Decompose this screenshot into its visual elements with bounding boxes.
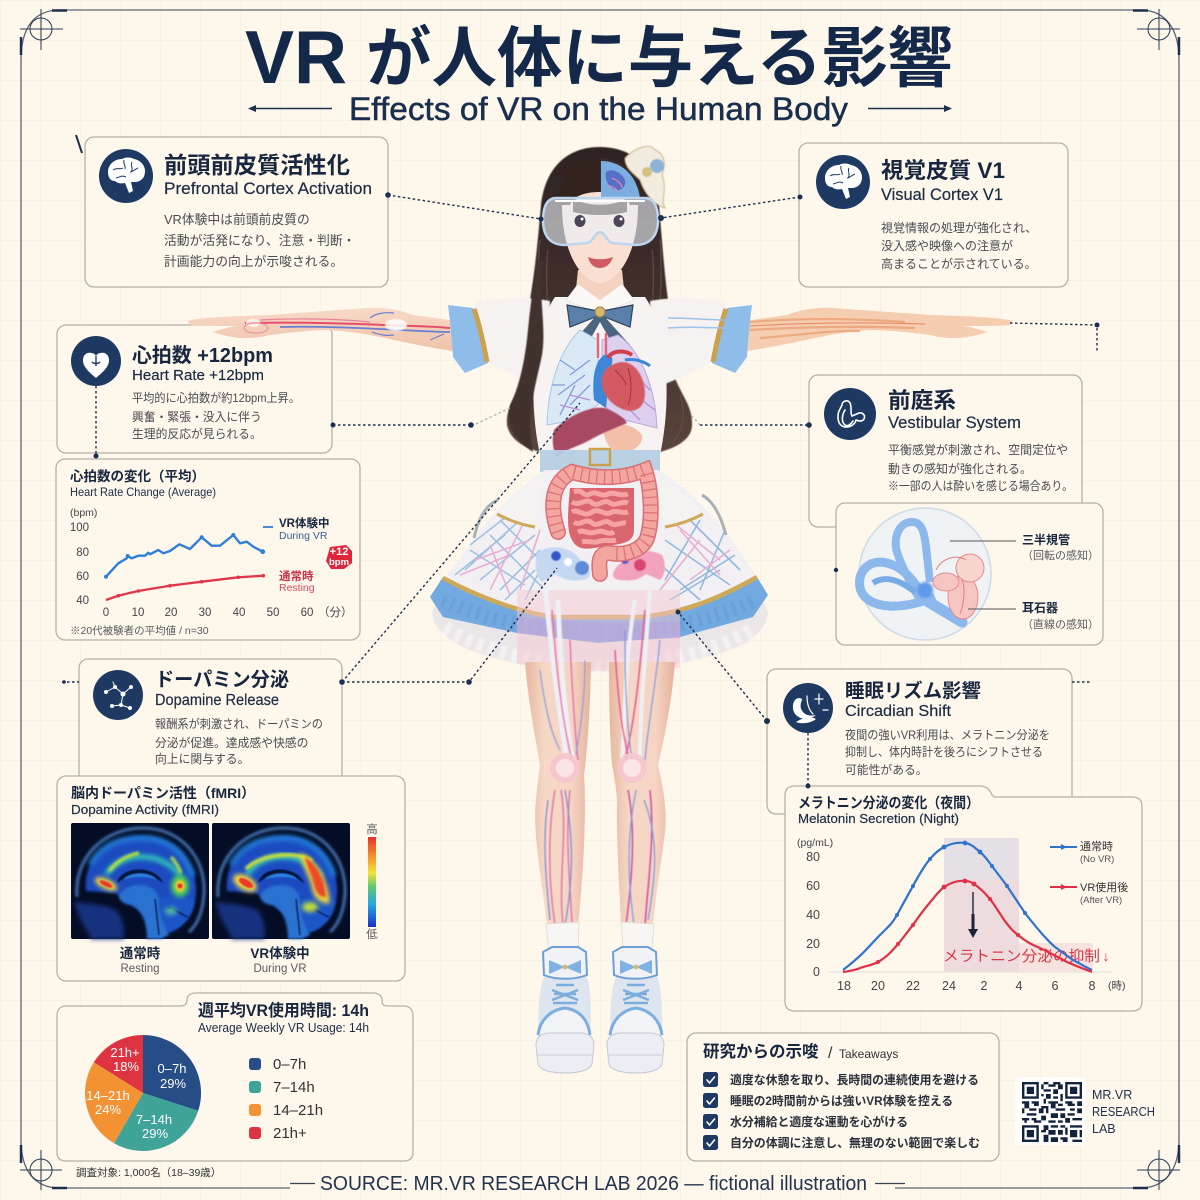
figure: left shoe bbox=[536, 947, 594, 1073]
legend: resting bbox=[279, 569, 315, 594]
figure: waist belt bbox=[540, 449, 660, 476]
figure: mouth bbox=[588, 257, 613, 268]
caption: during VR: During VR bbox=[253, 963, 307, 975]
legend: during VR: VR体験中 bbox=[279, 516, 329, 530]
axes: 20 bbox=[806, 937, 820, 951]
axis labels: 80 bbox=[76, 547, 89, 559]
organ: lungs bbox=[547, 330, 657, 428]
title: VR bbox=[245, 15, 347, 99]
checklist: 水分補給と適度な運動を心がける bbox=[730, 1114, 908, 1129]
axis labels: 10 bbox=[132, 607, 144, 619]
brain scan: resting bbox=[71, 823, 209, 939]
axes: (pg/mL) bbox=[797, 837, 833, 849]
chart heading: メラトニン分泌の変化（夜間） bbox=[798, 794, 979, 812]
figure: left leg bbox=[525, 662, 591, 925]
figure: hair flower bbox=[625, 146, 665, 208]
label: semicircular canals bbox=[950, 532, 1099, 609]
legend: 21h+ bbox=[273, 1125, 307, 1142]
heading: ドーパミン分泌 bbox=[155, 669, 289, 691]
figure: skirt gold trim bbox=[443, 577, 757, 617]
panel: inner ear bbox=[836, 503, 1103, 645]
text block: 抑制し、体内時計を後ろにシフトさせる bbox=[845, 745, 1043, 759]
anatomy: leg vessels bbox=[540, 585, 660, 925]
legend bbox=[249, 1056, 323, 1142]
callout: melatonin suppression: ↓ bbox=[1102, 948, 1110, 964]
label: otolith organs: （直線の感知） bbox=[1022, 617, 1099, 631]
panel: dopamine release bbox=[79, 659, 342, 784]
text block: 計画能力の向上が示唆される。 bbox=[164, 254, 343, 269]
axes: 2 bbox=[981, 979, 988, 993]
legend: 7–14h bbox=[273, 1079, 315, 1096]
pink band bbox=[944, 880, 1019, 972]
figure: back hair bbox=[507, 147, 692, 452]
checklist: 自分の体調に注意し、無理のない範囲で楽しむ bbox=[730, 1135, 980, 1150]
label: semicircular canals: 三半規管 bbox=[1022, 532, 1070, 547]
pie chart: 0–7h bbox=[158, 1061, 186, 1076]
text block: 可能性がある。 bbox=[845, 763, 928, 777]
text block bbox=[845, 728, 1050, 777]
caption: resting bbox=[120, 945, 161, 975]
heading: 視覚皮質 V1 bbox=[881, 158, 1005, 183]
color scale: 低 bbox=[366, 928, 378, 941]
axes: 60 bbox=[806, 879, 820, 893]
line: resting bbox=[106, 574, 265, 600]
figure: skirt petticoat bbox=[432, 595, 768, 672]
pie chart: 7–14h bbox=[136, 1112, 172, 1127]
text block: 平均的に心拍数が約12bpm上昇。 bbox=[132, 391, 300, 405]
connector: circadian bbox=[676, 610, 770, 724]
subheading: Average Weekly VR Usage: 14h bbox=[198, 1021, 369, 1035]
figure: right shoe bbox=[607, 947, 664, 1073]
icon: brain bbox=[816, 155, 870, 209]
axes: 24 bbox=[942, 979, 956, 993]
axis labels: 30 bbox=[199, 607, 211, 619]
checklist bbox=[703, 1072, 980, 1150]
figure: left arm bbox=[188, 308, 460, 352]
figure: face bbox=[557, 158, 643, 283]
axes bbox=[797, 837, 1126, 993]
pie chart bbox=[85, 1035, 201, 1151]
figure: blue ruffle bbox=[430, 577, 768, 643]
panel: fMRI dopamine activity bbox=[57, 776, 405, 981]
lab name: RESEARCH bbox=[1092, 1105, 1155, 1119]
heading bbox=[703, 1042, 898, 1062]
panel: melatonin chart bbox=[785, 786, 1142, 1011]
text block: 向上に関与する。 bbox=[155, 752, 249, 766]
text block: 没入感や映像への注意が bbox=[881, 238, 1013, 253]
figure: right arm bbox=[740, 308, 1012, 352]
axes: 20 bbox=[871, 979, 885, 993]
pie chart: 29% bbox=[142, 1126, 168, 1141]
figure: blouse torso bbox=[533, 297, 667, 455]
heading: 前頭前皮質活性化 bbox=[164, 152, 350, 178]
subheading: Visual Cortex V1 bbox=[881, 186, 1003, 204]
axis labels: 100 bbox=[70, 522, 89, 534]
text block: 視覚情報の処理が強化され、 bbox=[881, 220, 1037, 235]
figure: see-through panel over legs bbox=[517, 590, 680, 671]
subtitle with arrows bbox=[248, 91, 952, 127]
icon: neural network bbox=[93, 670, 143, 720]
survey footnote: 調査対象: 1,000名（18–39歳） bbox=[76, 1166, 221, 1179]
figure: overskirt peplum bbox=[474, 475, 726, 538]
text block: 高まることが示されている。 bbox=[881, 256, 1037, 271]
text block: 活動が活発になり、注意・判断・ bbox=[164, 233, 355, 248]
heading: 睡眠リズム影響 bbox=[845, 679, 981, 702]
axis labels bbox=[70, 507, 352, 619]
chart subheading: Heart Rate Change (Average) bbox=[70, 485, 216, 499]
panel: vestibular system bbox=[809, 375, 1082, 527]
legend: during VR: During VR bbox=[279, 530, 328, 542]
pie chart: 29% bbox=[160, 1076, 186, 1091]
line: during VR bbox=[104, 533, 265, 579]
callout: melatonin suppression bbox=[943, 943, 1110, 972]
connector: prefrontal to goggles bbox=[385, 192, 544, 222]
badge: +12 bpm: bpm bbox=[329, 557, 349, 568]
arrow: decrease bbox=[968, 892, 978, 938]
subheading: Dopamine Activity (fMRI) bbox=[71, 802, 219, 817]
organ: heart bbox=[593, 333, 650, 411]
axes: 0 bbox=[813, 965, 820, 979]
heading: Takeaways bbox=[839, 1047, 898, 1061]
heading: 週平均VR使用時間: 14h bbox=[198, 1001, 369, 1020]
connector: circadian to chart bbox=[806, 733, 810, 788]
lab name: LAB bbox=[1092, 1122, 1116, 1136]
axes: 18 bbox=[837, 979, 851, 993]
checklist: 適度な休憩を取り、長時間の連続使用を避ける bbox=[730, 1072, 979, 1087]
pie chart: 18% bbox=[113, 1059, 139, 1074]
text block: 生理的反応が見られる。 bbox=[132, 427, 262, 441]
figure: ruffle pleats bbox=[443, 600, 756, 634]
chart heading: 心拍数の変化（平均） bbox=[70, 468, 205, 484]
panel: takeaways bbox=[687, 1033, 999, 1161]
axes: (時) bbox=[1108, 980, 1126, 992]
figure: sleeve right bbox=[650, 298, 752, 388]
axes: 80 bbox=[806, 850, 820, 864]
axes: 40 bbox=[806, 908, 820, 922]
text block: 分泌が促進。達成感や快感の bbox=[155, 736, 308, 750]
figure: hair strands bbox=[517, 240, 683, 444]
figure: skirt body bbox=[443, 470, 757, 617]
title: が人体に与える影響 bbox=[366, 21, 953, 95]
text block bbox=[155, 717, 323, 766]
figure: skirt pattern bbox=[455, 510, 740, 600]
figure: front hair lock bbox=[509, 260, 543, 452]
figure: neck bbox=[575, 270, 625, 308]
axis labels: 20 bbox=[165, 607, 177, 619]
figure: petticoat pleats bbox=[445, 628, 755, 668]
connector: right hand bbox=[1010, 322, 1100, 352]
subheading: Vestibular System bbox=[888, 413, 1021, 432]
device: VR goggles bbox=[543, 198, 658, 245]
figure: right sock bbox=[621, 922, 654, 960]
icon: moon and stars bbox=[783, 683, 833, 733]
figure: purple ruffle overlay bbox=[517, 617, 680, 642]
connector: ear detail bbox=[834, 568, 838, 572]
brain scan: during VR bbox=[212, 823, 350, 939]
pie chart: 24% bbox=[95, 1102, 121, 1117]
legend: after VR: (After VR) bbox=[1080, 895, 1122, 906]
legend: during VR bbox=[263, 516, 329, 542]
panel: prefrontal cortex bbox=[85, 137, 388, 287]
connector: dopamine left tick bbox=[62, 680, 79, 684]
subheading: Circadian Shift bbox=[845, 703, 952, 720]
icon: inner ear bbox=[824, 388, 876, 440]
line: after VR bbox=[843, 879, 1092, 972]
caption: during VR bbox=[250, 945, 310, 975]
badge: +12 bpm bbox=[326, 545, 352, 569]
lab name bbox=[1092, 1088, 1155, 1136]
caption: resting: Resting bbox=[120, 963, 160, 975]
connector: vestibular bbox=[692, 416, 812, 428]
connector: heart card to chart bbox=[94, 386, 98, 458]
connector: visual cortex to goggles bbox=[658, 194, 802, 221]
legend: resting: Resting bbox=[279, 582, 315, 594]
axis labels: 0 bbox=[103, 607, 109, 619]
line: no VR bbox=[843, 841, 1092, 970]
subtitle with arrows: Effects of VR on the Human Body bbox=[349, 91, 848, 127]
text block: 興奮・緊張・没入に伴う bbox=[132, 410, 262, 424]
label: semicircular canals: （回転の感知） bbox=[1022, 548, 1099, 562]
legend: no VR: 通常時 bbox=[1080, 840, 1113, 853]
color scale: 高 bbox=[366, 823, 378, 836]
heading: / bbox=[828, 1045, 833, 1062]
panel: heart rate bbox=[57, 325, 332, 453]
heading: 心拍数 +12bpm bbox=[132, 344, 273, 367]
figure: collar and bow bbox=[566, 284, 634, 352]
subheading: Dopamine Release bbox=[155, 692, 279, 709]
text block bbox=[132, 391, 300, 441]
legend: 0–7h bbox=[273, 1056, 306, 1073]
legend: no VR: (No VR) bbox=[1080, 854, 1114, 865]
figure: right leg bbox=[609, 662, 675, 925]
heading: 研究からの示唆 bbox=[703, 1042, 819, 1061]
subheading: Heart Rate +12bpm bbox=[132, 367, 264, 384]
axis labels: （分） bbox=[318, 606, 352, 619]
pie chart: 21h+ bbox=[110, 1045, 140, 1060]
connector: dopamine to brain stem bbox=[339, 403, 580, 685]
icon: heart bbox=[71, 336, 121, 386]
QR code bbox=[1015, 1077, 1085, 1145]
panel: visual cortex bbox=[799, 143, 1068, 287]
text block: 平衡感覚が刺激され、空間定位や bbox=[888, 442, 1068, 457]
text block bbox=[164, 212, 355, 269]
legend: after VR bbox=[1050, 880, 1128, 906]
legend: after VR: VR使用後 bbox=[1080, 880, 1128, 894]
pie chart: 14–21h bbox=[86, 1088, 130, 1103]
legend: resting: 通常時 bbox=[279, 569, 314, 583]
lab name: MR.VR bbox=[1092, 1088, 1132, 1102]
color scale bbox=[366, 823, 378, 941]
subheading: Prefrontal Cortex Activation bbox=[164, 179, 372, 198]
axis labels: 40 bbox=[233, 607, 245, 619]
axis labels: 60 bbox=[76, 571, 89, 583]
axes: 22 bbox=[906, 979, 920, 993]
panel: heart rate chart bbox=[56, 459, 360, 640]
figure: left sock bbox=[546, 922, 579, 960]
text block bbox=[888, 442, 1073, 493]
text block: 動きの感知が強化される。 bbox=[888, 461, 1032, 476]
text block: 夜間の強いVR利用は、メラトニン分泌を bbox=[845, 728, 1050, 742]
figure: brain overlay on head bbox=[601, 161, 640, 198]
illustration: semicircular canals bbox=[859, 508, 991, 640]
chart subheading: Melatonin Secretion (Night) bbox=[798, 811, 959, 826]
connector: heart rate bbox=[330, 408, 510, 428]
axes: 4 bbox=[1016, 979, 1023, 993]
heading: 脳内ドーパミン活性（fMRI） bbox=[71, 785, 255, 801]
panel: weekly VR usage bbox=[57, 993, 413, 1161]
text block bbox=[881, 220, 1037, 271]
heading: 前庭系 bbox=[888, 388, 956, 413]
axis labels: (bpm) bbox=[70, 507, 97, 519]
axis labels: 40 bbox=[76, 595, 89, 607]
callout: melatonin suppression: メラトニン分泌の抑制 bbox=[943, 948, 1100, 965]
badge: +12 bpm: +12 bbox=[330, 546, 348, 558]
axis labels: 50 bbox=[267, 607, 279, 619]
shaded window bbox=[944, 838, 1019, 972]
text block: VR体験中は前頭前皮質の bbox=[164, 212, 310, 227]
legend: 14–21h bbox=[273, 1102, 323, 1119]
source line: SOURCE: MR.VR RESEARCH LAB 2026 — fictional illustration bbox=[320, 1173, 867, 1195]
text block: ※一部の人は酔いを感じる場合あり。 bbox=[888, 478, 1073, 493]
axes: 8 bbox=[1089, 979, 1096, 993]
anatomy: pelvis bbox=[536, 547, 665, 582]
anatomy: knees bbox=[550, 753, 647, 783]
label: otolith organs: 耳石器 bbox=[1022, 601, 1058, 615]
central figure: girl with anatomy overlay bbox=[188, 146, 1012, 1073]
mark: card corner artefact bbox=[76, 135, 82, 153]
axes: 6 bbox=[1052, 979, 1059, 993]
icon: brain bbox=[99, 149, 153, 203]
connector: circadian right tick bbox=[1072, 681, 1090, 683]
organ: intestines bbox=[553, 470, 651, 574]
caption: resting: 通常時 bbox=[120, 945, 161, 961]
axis labels: 60 bbox=[301, 607, 313, 619]
label: otolith organs bbox=[1022, 601, 1099, 631]
text block: 報酬系が刺激され、ドーパミンの bbox=[155, 717, 323, 731]
organ: liver and stomach bbox=[553, 408, 642, 458]
figure: sleeve left bbox=[448, 298, 550, 388]
legend: no VR bbox=[1050, 840, 1114, 865]
caption: during VR: VR体験中 bbox=[250, 945, 310, 961]
panel: circadian shift bbox=[767, 669, 1072, 814]
checklist: 睡眠の2時間前からは強いVR体験を控える bbox=[730, 1093, 953, 1108]
footnote: ※20代被験者の平均値 / n=30 bbox=[70, 624, 209, 637]
